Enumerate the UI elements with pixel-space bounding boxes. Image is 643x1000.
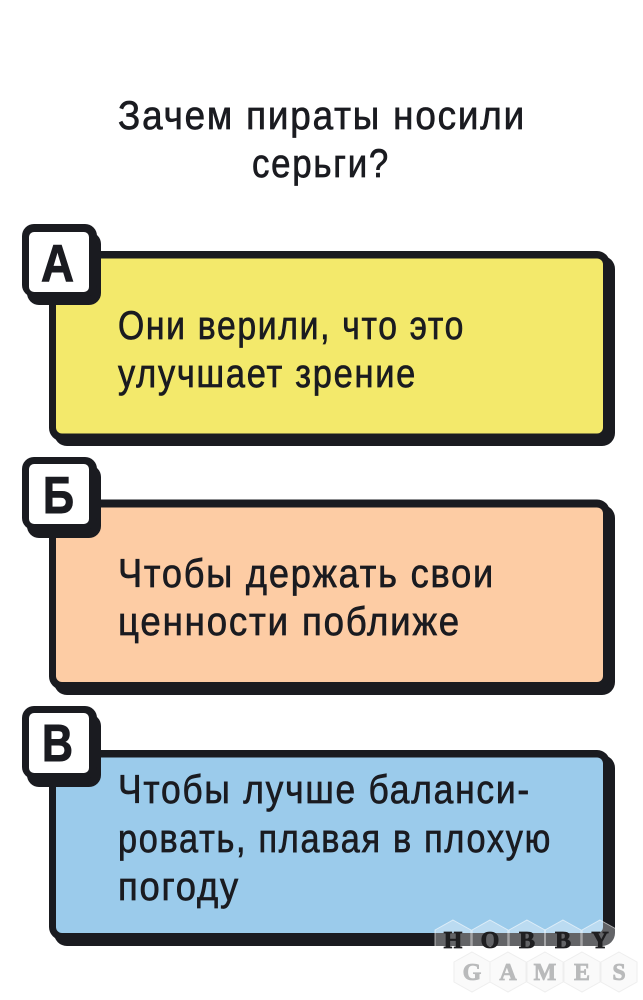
title	[118, 94, 526, 186]
watermark word: HOBBY: H	[444, 928, 463, 954]
answer B text: Чтобы держать свои	[118, 552, 495, 596]
answer A text	[118, 304, 465, 396]
badge B	[22, 457, 101, 538]
panel: answer B	[22, 457, 615, 695]
watermark word: GAMES: M	[534, 960, 556, 986]
watermark word: HOBBY: B	[555, 928, 571, 954]
answer A text: Они верили, что это	[118, 304, 465, 348]
watermark: Hobby Games logo	[435, 920, 637, 992]
watermark word: GAMES: G	[463, 960, 482, 986]
watermark word: GAMES: S	[612, 960, 626, 986]
watermark word: GAMES: A	[499, 960, 517, 986]
badge A	[22, 224, 101, 305]
badge B: Б	[43, 467, 74, 525]
watermark word: HOBBY: B	[519, 928, 535, 954]
answer A text: улучшает зрение	[118, 352, 417, 396]
badge A: А	[41, 235, 74, 293]
answer B text: ценности поближе	[118, 600, 461, 644]
answer C text	[118, 768, 552, 909]
watermark word: HOBBY: O	[481, 928, 499, 954]
answer B text	[118, 552, 495, 644]
watermark word: GAMES	[463, 960, 626, 986]
watermark word: HOBBY	[444, 928, 609, 954]
answer C text: ровать, плавая в плохую	[118, 817, 552, 861]
watermark word: GAMES: E	[574, 960, 590, 986]
answer C text: погоду	[118, 865, 240, 909]
watermark word: HOBBY: Y	[591, 928, 609, 954]
panel: answer A	[22, 224, 615, 446]
title: Зачем пираты носили	[118, 94, 526, 138]
badge C: В	[42, 715, 73, 773]
answer C text: Чтобы лучше баланси-	[118, 768, 531, 812]
panel: answer C	[22, 706, 615, 946]
title: серьги?	[252, 142, 390, 186]
badge C	[22, 706, 101, 787]
